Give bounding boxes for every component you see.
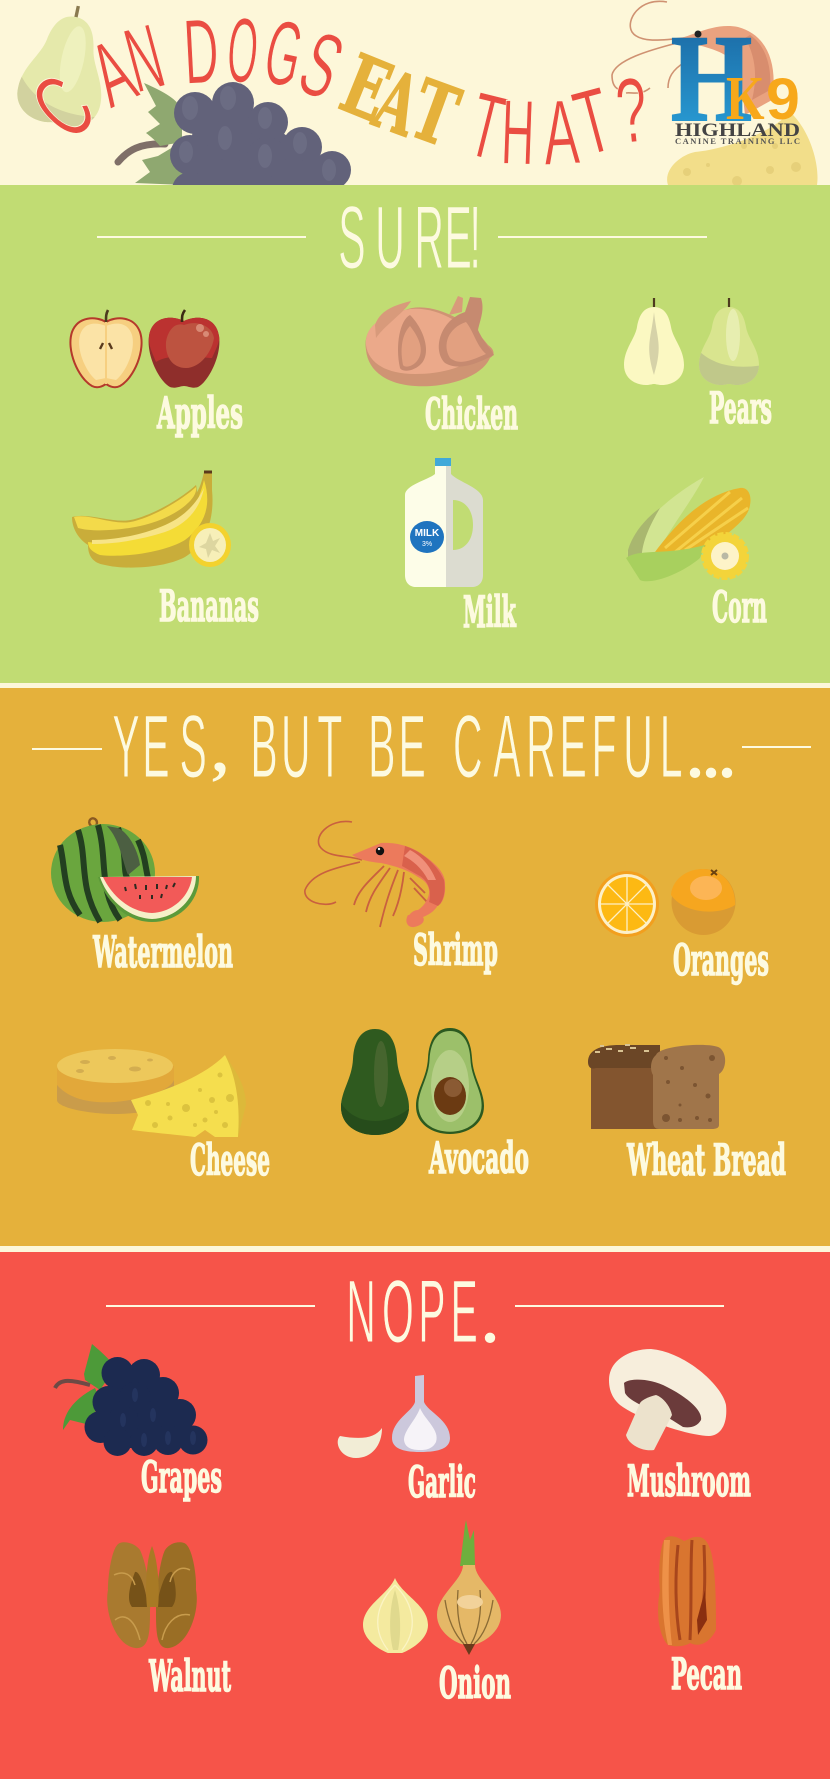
- logo: Highland K9: HIGHLAND: [675, 120, 800, 141]
- panel: nope: [0, 1252, 830, 1779]
- logo: Highland K9: [671, 10, 800, 147]
- heading: yes but be careful: BUT BE CAREFUL: [250, 696, 683, 796]
- panel: nope: Onion: [439, 1659, 511, 1709]
- icon: bananas: [72, 472, 231, 568]
- title: H: [500, 81, 536, 185]
- title: G: [256, 1, 311, 108]
- icon: header grapes: [114, 82, 351, 185]
- logo: Highland K9: CANINE TRAINING LLC: [675, 136, 800, 146]
- title: T: [398, 61, 471, 166]
- icon: milk jug: [405, 458, 483, 587]
- icon: mushroom: [609, 1349, 726, 1450]
- divider: [0, 1246, 830, 1252]
- icon: shrimp: [305, 821, 445, 927]
- panel: careful: Shrimp: [413, 926, 498, 976]
- heading: nope: .: [482, 1285, 498, 1356]
- panel: nope: Grapes: [141, 1453, 222, 1503]
- logo: Highland K9: K: [726, 65, 765, 133]
- icon: chicken: [366, 296, 494, 386]
- heading: sure: SURE!: [338, 187, 481, 287]
- icon: wheat bread: [588, 1045, 725, 1129]
- icon: grapes: [55, 1344, 208, 1456]
- panel: nope: Pecan: [671, 1650, 742, 1700]
- panel: careful: Watermelon: [93, 928, 233, 978]
- label: avocado: Avocado: [428, 1134, 529, 1184]
- divider: [0, 683, 830, 688]
- panel: sure: Corn: [712, 583, 767, 633]
- panel: nope: Garlic: [408, 1458, 476, 1508]
- title: ?: [611, 58, 653, 164]
- icon: milk jug: MILK: [415, 528, 440, 539]
- icon: cheese: [57, 1049, 246, 1137]
- title: T: [564, 67, 622, 175]
- title: N: [115, 5, 174, 113]
- title: A: [362, 52, 433, 155]
- icon: header pear: [17, 6, 102, 126]
- icon: avocado: [339, 1028, 484, 1139]
- icon: milk jug: 3%: [422, 541, 432, 548]
- icon: pears: [624, 298, 763, 389]
- header banner: [17, 0, 818, 185]
- title: C: [13, 57, 114, 158]
- label: apples: Apples: [156, 389, 243, 439]
- panel: sure: Bananas: [159, 582, 259, 632]
- icon: corn: [626, 477, 751, 581]
- panel: sure: Milk: [463, 588, 517, 638]
- title: D: [181, 0, 221, 104]
- panel: careful: [0, 688, 830, 1246]
- panel: nope: Walnut: [149, 1652, 231, 1702]
- title: [13, 0, 653, 185]
- title: O: [223, 0, 262, 103]
- icon: garlic: [338, 1375, 450, 1458]
- heading: nope: [106, 1261, 724, 1361]
- icon: oranges: [595, 869, 736, 937]
- heading: yes but be careful: ,: [212, 715, 228, 786]
- title: A: [541, 80, 582, 184]
- title: S: [287, 11, 356, 119]
- title: E: [329, 35, 404, 141]
- title: T: [459, 73, 514, 180]
- panel: careful: Cheese: [190, 1136, 270, 1186]
- logo: Highland K9: 9: [766, 66, 800, 132]
- icon: pecan: [658, 1536, 716, 1646]
- icon: watermelon: [51, 818, 199, 922]
- icon: walnut: [107, 1542, 197, 1648]
- panel: sure: [0, 185, 830, 683]
- logo: Highland K9: H: [671, 10, 752, 147]
- heading: yes but be careful: [32, 696, 811, 796]
- icon: header cheese: [667, 112, 818, 186]
- title: A: [76, 19, 150, 127]
- icon: onion: [363, 1520, 501, 1655]
- icon: header shrimp: [612, 1, 774, 115]
- panel: sure: Chicken: [425, 390, 518, 440]
- heading: yes but be careful: YES: [112, 696, 207, 796]
- heading: yes but be careful: ...: [687, 720, 735, 791]
- icon: apples: [70, 310, 219, 388]
- heading: nope: NOPE: [346, 1261, 478, 1361]
